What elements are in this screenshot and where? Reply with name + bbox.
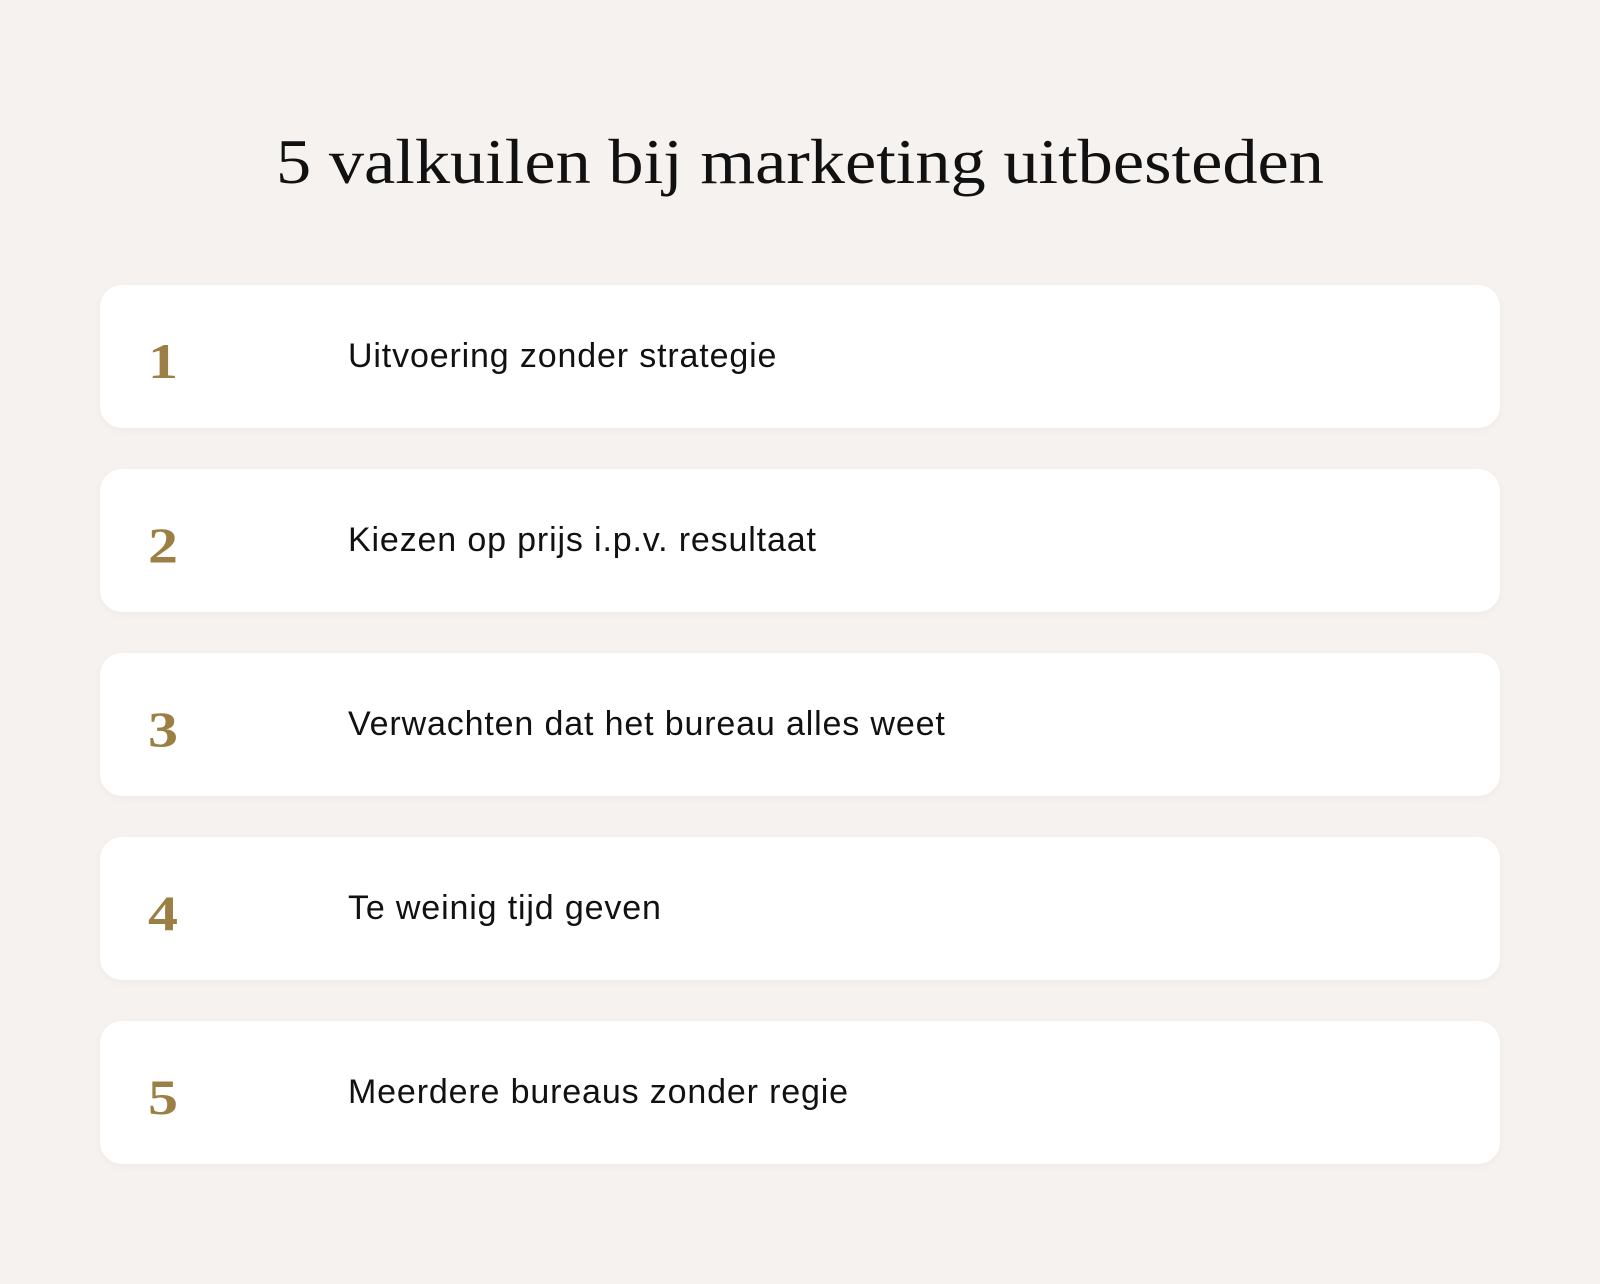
text 2: Kiezen op prijs i.p.v. resultaat (348, 521, 817, 559)
card 1 (100, 285, 1500, 428)
text 1: Uitvoering zonder strategie (348, 337, 777, 375)
number 5: 5 (148, 1069, 178, 1125)
card 5 (100, 1021, 1500, 1164)
text 3: Verwachten dat het bureau alles weet (348, 705, 946, 743)
card 2 (100, 469, 1500, 612)
number 4: 4 (148, 885, 178, 941)
title: 5 valkuilen bij marketing uitbesteden (276, 126, 1324, 197)
text 4: Te weinig tijd geven (348, 889, 662, 927)
number 3: 3 (148, 701, 178, 757)
text 5: Meerdere bureaus zonder regie (348, 1073, 849, 1111)
card 3 (100, 653, 1500, 796)
card 4 (100, 837, 1500, 980)
number 2: 2 (148, 517, 178, 573)
number 1: 1 (148, 333, 178, 389)
